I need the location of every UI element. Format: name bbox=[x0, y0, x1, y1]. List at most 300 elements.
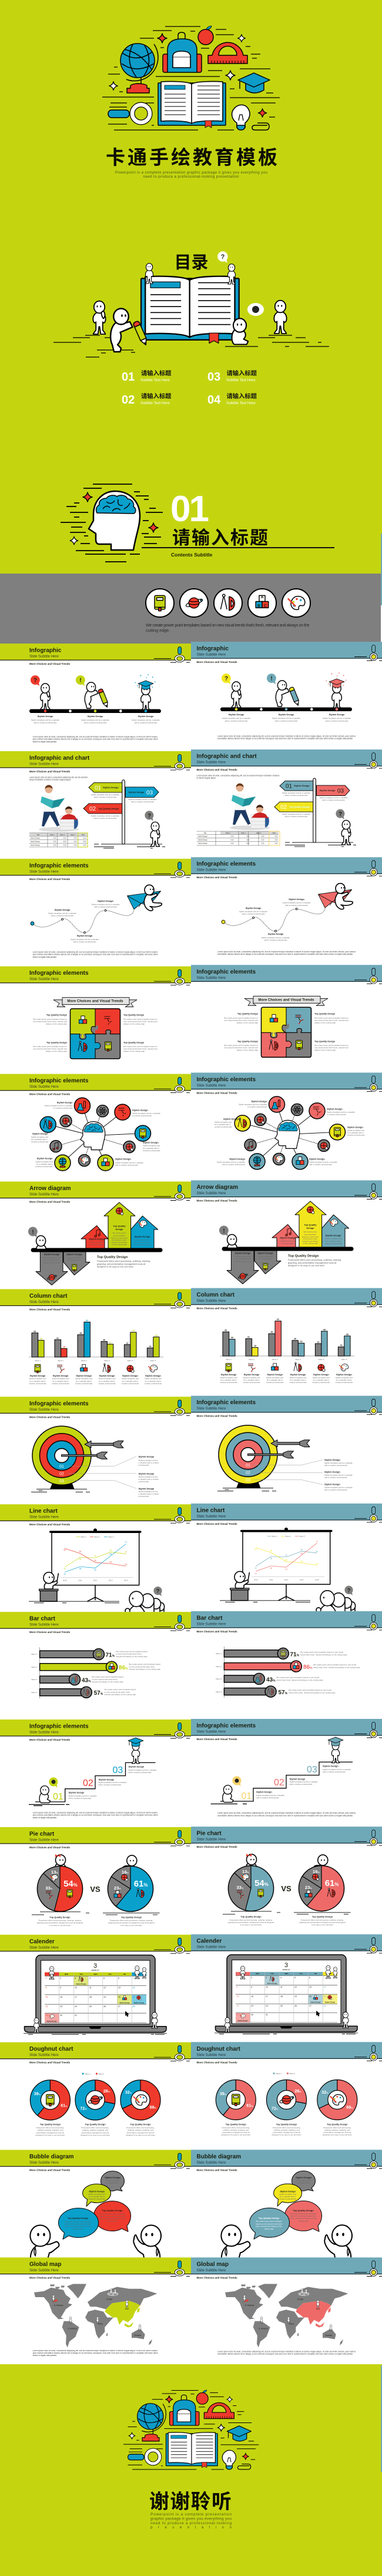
puzzle captions left: always on the cutting edge bbox=[237, 1049, 258, 1051]
target captions: a valuable add to creative bbox=[139, 1492, 159, 1495]
slide: target, teal bbox=[191, 1396, 382, 1506]
slide: column chart, teal: More Choices and Visual Trends bbox=[196, 1307, 237, 1310]
network captions: Stylish Design bbox=[347, 1125, 363, 1128]
network captions: Stylish Design bbox=[57, 1101, 73, 1104]
column values: 15 bbox=[254, 1345, 256, 1347]
calendar dates: 9 bbox=[251, 1986, 252, 1988]
pie percentages: 23% bbox=[114, 1885, 121, 1891]
calendar dates: 14 bbox=[323, 1986, 326, 1988]
stair captions: add to creative professionals bbox=[99, 1784, 122, 1786]
calendar dates: 28 bbox=[133, 2005, 135, 2008]
body text: exercitation ullamco laboris nisi ut aliquip ex ea commodo consequat. Duis aute irure dolor in reprehenderit in voluptate velit esse cillum dolore eu fugiat nulla pariatur. bbox=[217, 738, 353, 740]
stair captions: Stylish Design bbox=[323, 1765, 339, 1767]
slide: arrow diagram, teal: More Choices and Visual Trends bbox=[196, 1199, 237, 1202]
bar percentages: 43% bbox=[266, 1677, 276, 1683]
timeline captions: add to creative professionals bbox=[84, 721, 107, 724]
sign labels: Stylish Design bbox=[320, 789, 336, 792]
sign labels bbox=[280, 784, 348, 818]
arrow labels: point templates bbox=[113, 1234, 126, 1237]
doughnut captions: designed to be easy to use and learn bbox=[81, 2134, 110, 2136]
map labels: Asia bbox=[316, 2308, 320, 2310]
cover subtitle: need to produce a professional-looking presentation bbox=[143, 175, 239, 179]
column axis labels: Value 3 bbox=[272, 1358, 278, 1361]
column values: 62 bbox=[86, 1319, 88, 1322]
network captions: Stylish Design bbox=[309, 1157, 325, 1160]
doughnut captions bbox=[221, 2122, 352, 2136]
slide heading bbox=[29, 1724, 89, 1734]
calendar dates: 16 bbox=[60, 1996, 62, 1998]
doughnut captions: designed to be easy to use and learn bbox=[323, 2134, 352, 2136]
column captions: Stylish templates and bbox=[122, 1378, 139, 1380]
column captions: Stylish templates and bbox=[290, 1377, 307, 1379]
bar descriptions: relevant and always on the cutting edge bbox=[92, 1681, 123, 1683]
calendar dates: 19 bbox=[103, 1996, 106, 1998]
arrow labels: on the cutting edge bbox=[303, 1242, 318, 1245]
calendar dates: 31 bbox=[266, 2014, 268, 2016]
target captions: Stylish Design bbox=[139, 1472, 155, 1475]
table labels: Value 3 bbox=[71, 834, 76, 836]
sign labels: Stylish templates and be a valuable bbox=[91, 815, 119, 817]
slide: global map, teal: More Choices and Visual Trends bbox=[196, 2277, 237, 2279]
column captions bbox=[220, 1373, 353, 1384]
column captions: Stylish templates and bbox=[336, 1377, 353, 1379]
calendar dates: 24 bbox=[266, 2005, 268, 2007]
pie captions: to be easy to use and learn bbox=[120, 1924, 142, 1927]
slide heading: Global map bbox=[29, 2261, 61, 2268]
table labels: Value 2 bbox=[241, 832, 246, 834]
column values: 44 bbox=[323, 1328, 326, 1331]
column axis labels: Value 5 bbox=[127, 1359, 133, 1362]
bar descriptions: relevant and always on the cutting edge bbox=[104, 1694, 136, 1696]
arrow labels: trends that's fresh, bbox=[112, 1239, 127, 1241]
network captions bbox=[215, 1099, 365, 1165]
bubble texts: cutting edge bbox=[299, 2220, 309, 2222]
arrow labels: We create power bbox=[304, 1231, 317, 1233]
path labels bbox=[48, 899, 120, 943]
network captions: Stylish templates and bbox=[347, 1129, 364, 1131]
column values: 22 bbox=[126, 1342, 128, 1344]
slide heading: Slide Subtitle Here bbox=[29, 1301, 59, 1304]
arrows and bar bbox=[219, 1201, 354, 1284]
icon: book circle bbox=[146, 589, 174, 617]
arrow labels: trends that's fresh, bbox=[303, 1238, 318, 1240]
column captions: be a valuable add to bbox=[313, 1379, 329, 1381]
slide heading: Infographic elements bbox=[29, 862, 89, 869]
total column highlight bbox=[78, 833, 88, 847]
calendar dates: 21 bbox=[133, 1996, 135, 1998]
table labels: Value 3 bbox=[256, 832, 262, 834]
line chart data labels: 24 bbox=[125, 1564, 127, 1566]
map labels bbox=[245, 2298, 332, 2337]
slide heading: Infographic and chart bbox=[196, 754, 257, 760]
calendar dates: 5 bbox=[103, 1977, 105, 1980]
slide heading bbox=[196, 1938, 226, 1950]
table labels: 0.00 bbox=[231, 836, 234, 838]
sign labels: Stylish Design bbox=[128, 791, 145, 794]
body text bbox=[217, 1812, 356, 1817]
slide: bar chart, green: More Choices and Visual Trends bbox=[29, 1631, 71, 1634]
doughnut captions: presentation management tools all bbox=[273, 2131, 300, 2134]
bubble texts: We create power point templates bbox=[290, 2212, 317, 2215]
calendar month bbox=[283, 1962, 290, 1971]
pie charts with figures bbox=[223, 1854, 351, 1914]
slide heading: Slide Subtitle Here bbox=[196, 1731, 226, 1734]
arrow side text: Powerpoint offers word processing, outlining, drawing, bbox=[288, 1259, 341, 1261]
slide: doughnut chart, teal: More Choices and Visual Trends bbox=[196, 2061, 237, 2064]
versus label: VS bbox=[281, 1884, 291, 1893]
timeline captions: Stylish templates and be a valuable bbox=[132, 719, 160, 721]
stair numbers: 03 bbox=[113, 1765, 123, 1775]
stair captions: add to creative professionals bbox=[256, 1797, 279, 1799]
target captions: add to creative professionals bbox=[324, 1489, 347, 1491]
slide heading: Calender bbox=[196, 1938, 222, 1945]
network captions: Stylish templates and bbox=[143, 1145, 160, 1147]
slide heading: Doughnut chart bbox=[29, 2046, 73, 2052]
bubble texts: Stylish templates and bbox=[279, 2193, 296, 2195]
doughnut captions: outlining, drawing, graphing, and bbox=[324, 2129, 350, 2131]
calendar month: MARCH bbox=[92, 1969, 99, 1971]
column captions: Stylish Design bbox=[313, 1373, 329, 1376]
table labels: Value 2 bbox=[60, 834, 65, 836]
arrow labels: be a valuable add to bbox=[43, 1259, 60, 1261]
arrow labels: ! bbox=[223, 1228, 225, 1234]
slide: paper plane path, green: More Choices and Visual Trends bbox=[29, 878, 71, 881]
line chart data labels: 62 bbox=[64, 1549, 66, 1551]
body text: Lorem ipsum dolor sit amet, consectetur adipiscing elit, sed do eiusmod tempor incididunt ut labore et dolore magna aliqua. Ut enim ad minim veniam, bbox=[33, 1812, 158, 1814]
puzzle and banner bbox=[53, 998, 137, 1059]
slide heading bbox=[29, 1831, 59, 1842]
slide heading: Slide Subtitle Here bbox=[29, 1193, 59, 1197]
slide: paper plane path, teal: More Choices and Visual Trends bbox=[196, 876, 237, 879]
intro text: tempor incididunt ut labore et dolore magna aliqua. bbox=[29, 778, 71, 781]
bubble texts: creative professionals bbox=[279, 2198, 297, 2200]
contents item 04: 04 bbox=[207, 394, 221, 406]
question mark: ? bbox=[347, 1587, 350, 1593]
calendar dates: 6 bbox=[309, 1977, 310, 1979]
column captions: be a valuable add to bbox=[290, 1379, 306, 1381]
column captions: Stylish templates and bbox=[313, 1377, 330, 1379]
sign labels: 02 bbox=[280, 804, 287, 811]
calendar dates: 25 bbox=[280, 2005, 283, 2007]
slide heading: Infographic elements bbox=[196, 861, 256, 868]
bubble marks: ? bbox=[33, 678, 37, 684]
column captions: be a valuable add to bbox=[52, 1380, 69, 1382]
puzzle captions right: We create power point templates based on bbox=[314, 1017, 349, 1019]
body text: quis nostrud exercitation ullamco laboris nisi ut aliquip ex ea commodo consequat. Duis aute irure dolor in reprehenderit in voluptate velit esse cillum bbox=[33, 738, 158, 741]
target captions: Stylish templates and be bbox=[139, 1459, 158, 1461]
timeline captions: Stylish templates and be a valuable bbox=[31, 719, 59, 721]
table labels: 0.00 bbox=[83, 841, 86, 842]
ring numbers: 01 bbox=[59, 1465, 64, 1469]
slide heading: Slide Subtitle Here bbox=[196, 1299, 226, 1303]
column captions: creative professionals bbox=[336, 1381, 353, 1384]
section title: 请输入标题 bbox=[172, 528, 268, 548]
slide heading: Slide Subtitle Here bbox=[29, 1838, 59, 1842]
slide: pie chart, green bbox=[0, 1827, 191, 1935]
calendar month: MARCH bbox=[283, 1969, 290, 1971]
sign labels: add to creative professionals bbox=[322, 799, 345, 801]
network captions: creative professionals bbox=[35, 1165, 53, 1168]
puzzle captions right: new visual trends that's fresh, relevant and bbox=[123, 1021, 158, 1023]
arrow labels: be a valuable add to bbox=[325, 1240, 341, 1242]
bar percentages: 57% bbox=[94, 1690, 103, 1697]
arrow labels: Stylish Design bbox=[235, 1252, 251, 1254]
doughnut captions: presentation management tools all bbox=[82, 2131, 109, 2134]
target captions: Stylish Design bbox=[139, 1487, 155, 1490]
pie captions: graphing and presentation management tools all designed bbox=[228, 1921, 274, 1924]
path labels: Stylish templates and be a valuable bbox=[48, 912, 76, 914]
table labels bbox=[198, 832, 278, 845]
slide: doughnut chart, teal bbox=[191, 2042, 382, 2152]
line chart years: 2014 bbox=[315, 1578, 319, 1581]
column values: 43 bbox=[33, 1330, 36, 1332]
map labels: Asia bbox=[125, 2308, 129, 2310]
puzzle captions right: Top Quality Design bbox=[123, 1041, 145, 1044]
table extension bbox=[196, 831, 220, 845]
column captions: Stylish templates and bbox=[29, 1378, 46, 1380]
arrow labels: Top Quality bbox=[304, 1224, 317, 1226]
calendar dates: 15 bbox=[236, 1995, 239, 1998]
line chart legend: Value 1 bbox=[81, 1536, 86, 1538]
path labels: add to creative professionals bbox=[73, 941, 96, 943]
target captions: Stylish Design bbox=[324, 1458, 340, 1461]
slide: bubble diagram, teal bbox=[191, 2150, 382, 2261]
slide: column chart, green: More Choices and Visual Trends bbox=[29, 1308, 71, 1311]
signpost, photo and table bbox=[220, 778, 356, 847]
column values: 15 bbox=[63, 1346, 65, 1348]
arrow labels: based on new visual bbox=[111, 1237, 128, 1239]
bar descriptions: relevant and always on the cutting edge bbox=[116, 1655, 148, 1658]
calendar dates: 4 bbox=[89, 1977, 91, 1980]
puzzle captions right: Top Quality Design bbox=[123, 1014, 145, 1017]
slide: global map, green: More Choices and Visual Trends bbox=[29, 2277, 71, 2279]
table labels: Stylish Design bbox=[198, 836, 207, 838]
stair numbers: 03 bbox=[307, 1765, 317, 1775]
bubble texts: Design inspiration bbox=[105, 2180, 120, 2182]
arrow side text bbox=[97, 1255, 150, 1268]
dashed flight path with plane bbox=[32, 885, 162, 934]
column axis labels: Value 6 bbox=[150, 1359, 156, 1362]
icon: blocks circle bbox=[248, 589, 276, 617]
bubble texts: Top Quality Design bbox=[259, 2217, 280, 2220]
slide heading: Infographic elements bbox=[196, 1722, 256, 1729]
doughnut captions: designed to be easy to use and learn bbox=[221, 2134, 251, 2136]
bar labels: Value 3 bbox=[31, 1678, 37, 1681]
speech bubbles with figures bbox=[221, 2171, 352, 2261]
ring numbers: 02 bbox=[246, 1471, 250, 1475]
table labels: 0.00 bbox=[53, 841, 56, 842]
stair captions: Stylish Design bbox=[289, 1778, 306, 1780]
doughnut captions: Powerpoint offers word processing, bbox=[273, 2127, 300, 2129]
calendar dates: 15 bbox=[46, 1996, 48, 1998]
legend: Value 1 bbox=[85, 2072, 91, 2075]
slide heading bbox=[196, 1292, 235, 1303]
column captions: Stylish Design bbox=[290, 1373, 306, 1376]
sign labels: Stylish templates and be a valuable bbox=[91, 794, 119, 796]
line chart data labels: 56 bbox=[300, 1548, 303, 1551]
bubble marks bbox=[224, 675, 273, 682]
network captions: add to creative professionals bbox=[115, 1164, 138, 1167]
slide heading: Slide Subtitle Here bbox=[196, 1838, 226, 1842]
slide heading: Slide Subtitle Here bbox=[196, 1407, 226, 1411]
pie percentages: 13% bbox=[242, 1869, 249, 1874]
doughnut captions: outlining, drawing, graphing, and bbox=[128, 2129, 153, 2131]
slide heading: Slide Subtitle Here bbox=[196, 1192, 226, 1195]
slide: line chart, green bbox=[0, 1504, 191, 1616]
column values: 23 bbox=[109, 1341, 112, 1344]
slide heading: Infographic bbox=[29, 647, 62, 654]
pie captions: to be easy to use and learn bbox=[240, 1924, 262, 1926]
sign labels: 02 bbox=[89, 806, 96, 812]
arrow labels: Top Quality bbox=[113, 1225, 126, 1227]
slide heading: Slide Subtitle Here bbox=[196, 2269, 226, 2272]
network captions: add to creative professionals bbox=[222, 1163, 245, 1165]
slide heading: Infographic and chart bbox=[29, 755, 90, 761]
network captions: to creative professionals bbox=[132, 1115, 152, 1117]
column axis labels: Value 2 bbox=[58, 1359, 63, 1362]
table labels: 0.00 bbox=[231, 843, 234, 845]
network captions: be a valuable add to bbox=[215, 1123, 231, 1125]
bubble texts: We create power point templates bbox=[99, 2212, 126, 2215]
column values: 44 bbox=[132, 1329, 135, 1332]
network captions: Stylish Design bbox=[143, 1141, 159, 1144]
doughnut captions: outlining, drawing, graphing, and bbox=[82, 2129, 108, 2131]
stair captions: Stylish Design bbox=[99, 1778, 115, 1781]
calendar dates: 26 bbox=[103, 2005, 106, 2008]
line chart years bbox=[254, 1578, 319, 1581]
slide heading bbox=[29, 1185, 71, 1197]
slide heading: Arrow diagram bbox=[196, 1184, 238, 1191]
puzzle captions right: We create power point templates based on bbox=[314, 1044, 349, 1047]
calendar dates: 18 bbox=[280, 1995, 283, 1998]
doughnut percentages bbox=[220, 2090, 353, 2111]
calendar dates: 30 bbox=[251, 2014, 253, 2016]
bar chart bbox=[224, 1647, 301, 1698]
slide: puzzle, teal bbox=[191, 965, 382, 1075]
timeline captions: Stylish Design bbox=[229, 713, 244, 716]
slide: bubble diagram, green: More Choices and Visual Trends bbox=[29, 2169, 71, 2172]
table labels: Total bbox=[272, 832, 276, 834]
contents item 01 bbox=[122, 369, 172, 384]
calendar weekdays: TUE bbox=[79, 1973, 83, 1975]
network captions: be a valuable add to bbox=[36, 1163, 53, 1165]
column captions: Stylish Design bbox=[336, 1373, 352, 1376]
legend bbox=[273, 2072, 295, 2075]
bubble texts: Stylish Design bbox=[280, 2190, 296, 2192]
doughnut percentages: 39% bbox=[34, 2092, 41, 2097]
pie captions bbox=[228, 1915, 346, 1926]
network captions: Stylish templates and be a valuable bbox=[239, 1103, 267, 1105]
bar descriptions: We create power point templates based bbox=[104, 1688, 136, 1691]
table labels: Value 1 bbox=[226, 832, 231, 834]
sign labels: Stylish templates and be a valuable bbox=[129, 798, 157, 801]
slide: column chart, green bbox=[0, 1289, 191, 1397]
target captions: professionals bbox=[139, 1464, 149, 1466]
bubble texts: fresh, relevant and always on the bbox=[256, 2225, 282, 2227]
path labels: Stylish Design bbox=[268, 932, 284, 935]
column values bbox=[33, 1319, 158, 1348]
slide heading: Slide Subtitle Here bbox=[196, 1515, 226, 1518]
column values: 28 bbox=[103, 1339, 105, 1341]
stair captions: add to creative professionals bbox=[323, 1771, 346, 1773]
sign labels: Stylish templates and be a valuable bbox=[320, 797, 348, 799]
body text bbox=[217, 2351, 356, 2355]
brain network diagram bbox=[40, 1098, 150, 1171]
doughnut captions: Top Quality Design bbox=[226, 2122, 246, 2125]
table labels: 0.00 bbox=[247, 839, 250, 841]
bar percentages: 86% bbox=[119, 1665, 128, 1671]
arrow labels: Stylish Design bbox=[326, 1234, 341, 1237]
slide heading: Slide Subtitle Here bbox=[196, 653, 226, 657]
slide: Infographic and chart, teal: More Choices and Visual Trends bbox=[196, 768, 237, 771]
intro paragraph: We create power point templates based on new visual trends that's fresh, relevant and always on the bbox=[146, 622, 309, 628]
table labels: 0.00 bbox=[83, 844, 86, 846]
calendar dates: 16 bbox=[251, 1995, 253, 1998]
cover illustration: school supplies bbox=[102, 26, 280, 130]
line chart data labels bbox=[64, 1541, 127, 1575]
bubble texts: Stylish Design bbox=[105, 2176, 121, 2179]
slide: target, green: More Choices and Visual Trends bbox=[29, 1415, 71, 1418]
calendar month: 3 bbox=[93, 1962, 97, 1970]
network captions: Stylish Design bbox=[132, 1109, 148, 1112]
pie captions: to be easy to use and learn bbox=[49, 1924, 71, 1927]
stair numbers: 01 bbox=[241, 1791, 252, 1801]
calendar dates: 17 bbox=[266, 1995, 268, 1998]
slide: arrow diagram, green bbox=[0, 1181, 191, 1289]
pie captions: Top Quality Design bbox=[312, 1915, 333, 1918]
calendar dates: 29 bbox=[236, 2014, 239, 2016]
column values: 28 bbox=[294, 1338, 296, 1340]
pie captions: graphing and presentation management tools all designed bbox=[299, 1921, 346, 1924]
target with arrows bbox=[31, 1426, 123, 1492]
sign labels: Top Quality Design bbox=[98, 807, 119, 810]
slide heading bbox=[29, 1616, 59, 1627]
column chart bbox=[220, 1321, 354, 1372]
target captions: professionals bbox=[139, 1495, 149, 1497]
table labels: Stylish Design bbox=[198, 843, 207, 845]
cover subtitle bbox=[115, 171, 268, 179]
column chart bbox=[29, 1322, 163, 1373]
arrow labels: point templates bbox=[304, 1233, 317, 1235]
body text: Lorem ipsum dolor sit amet, consectetur adipiscing elit, sed do eiusmod tempor incididunt ut labore et dolore magna aliqua. Ut enim ad minim veniam, bbox=[33, 735, 158, 738]
line chart data labels: 30 bbox=[94, 1559, 96, 1562]
slide: bar chart, green bbox=[0, 1612, 191, 1720]
bar descriptions: on new visual trends that's fresh, bbox=[116, 1653, 142, 1655]
column captions: be a valuable add to bbox=[99, 1380, 115, 1382]
doughnut captions: outlining, drawing, graphing, and bbox=[37, 2129, 63, 2131]
body text: dolore eu fugiat nulla pariatur. bbox=[33, 2354, 57, 2357]
bar labels: Value 1 bbox=[216, 1652, 222, 1655]
section number: 01 bbox=[170, 489, 209, 529]
slide: line chart, teal: More Choices and Visual Trends bbox=[196, 1522, 237, 1525]
bar descriptions: trends that's fresh, relevant and always on the cutting edge bbox=[313, 1666, 360, 1668]
bubble marks bbox=[33, 678, 82, 684]
line chart data labels: 28 bbox=[300, 1560, 303, 1562]
body text bbox=[33, 1812, 158, 1819]
icon: compass circle bbox=[214, 589, 242, 617]
slide heading: Infographic elements bbox=[29, 1078, 89, 1084]
arrow side text: Top Quality Design bbox=[97, 1255, 128, 1259]
calendar dates: 8 bbox=[236, 1986, 237, 1988]
closing title: 谢谢聆听 bbox=[149, 2491, 232, 2513]
stair captions: Stylish Design bbox=[128, 1765, 145, 1768]
slide: calendar, green bbox=[0, 1935, 191, 2043]
calendar dates: 13 bbox=[118, 1987, 120, 1989]
column values: 30 bbox=[231, 1337, 233, 1339]
stair captions: add to creative professionals bbox=[128, 1771, 152, 1774]
ring numbers: 03 bbox=[246, 1478, 250, 1482]
legend bbox=[82, 2073, 104, 2075]
